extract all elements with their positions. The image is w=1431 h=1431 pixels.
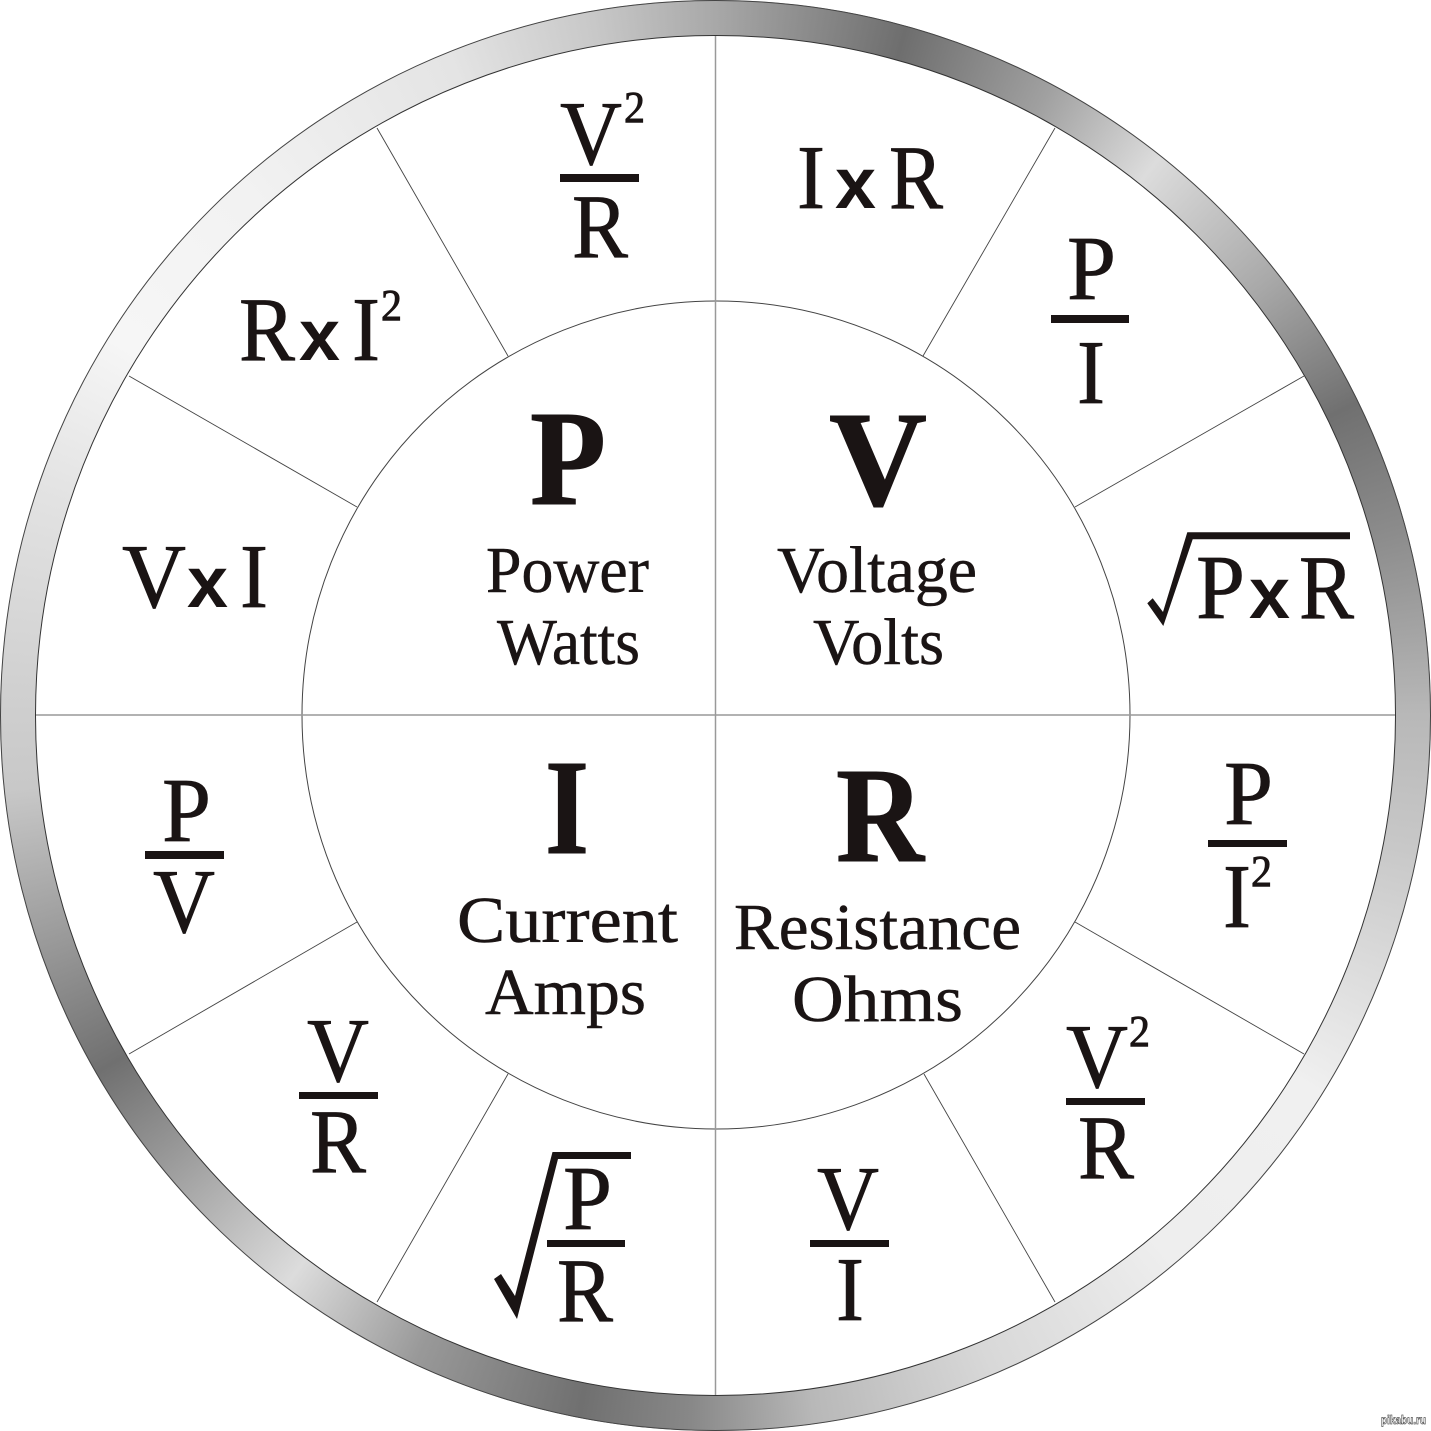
panel: Resistance: Ohms [792, 963, 963, 1036]
formula: V over I: V [817, 1148, 879, 1249]
formula: I x R: R [889, 127, 943, 228]
formula: P over I: P [1067, 218, 1116, 319]
formula: I x R: x [835, 144, 876, 224]
formula: square root of P x R: R [1299, 537, 1354, 638]
formula: P over V [145, 760, 224, 952]
formula: V squared over R (resistance): 2 [1129, 1007, 1150, 1056]
formula: square root of P over R [494, 1148, 631, 1341]
formula: V squared over R (power): V [560, 83, 622, 184]
formula: R x I squared: I [352, 279, 380, 380]
panel: Current: Current [457, 884, 678, 957]
panel: Power: Watts [497, 606, 640, 679]
panel: Voltage: Volts [813, 606, 944, 679]
formula: V squared over R (resistance): V [1066, 1006, 1128, 1107]
panel: Voltage [777, 385, 977, 679]
formula: P over I squared: P [1224, 743, 1273, 844]
panel: Resistance: Resistance [734, 891, 1021, 964]
formula: V x I: V [122, 526, 186, 627]
panel: Power: P [530, 384, 606, 534]
panel: Resistance [734, 741, 1021, 1036]
formula: P over I [1051, 218, 1129, 423]
formula: V over R [299, 1000, 378, 1192]
formula: square root of P over R: R [557, 1240, 613, 1341]
formula: P over I squared [1208, 743, 1287, 947]
panel: Voltage: V [829, 385, 927, 535]
formula: P over I squared: I [1223, 846, 1251, 947]
panel: Voltage: Voltage [777, 534, 977, 607]
formula: square root of P over R: P [563, 1148, 612, 1249]
formula: V over R: V [307, 1000, 369, 1101]
formula: V over I: I [836, 1239, 864, 1340]
panel: Current: I [545, 733, 589, 883]
formula: I x R: I [797, 127, 825, 228]
formula: R x I squared: 2 [381, 281, 402, 330]
formula: V x I: I [240, 526, 268, 627]
formula: V squared over R (power): R [572, 176, 628, 277]
formula: P over I squared: 2 [1251, 847, 1272, 896]
panel: Power: Power [486, 534, 649, 607]
formula: R x I squared [239, 279, 402, 380]
formula: V x I: x [187, 543, 228, 623]
formula: I x R [797, 127, 943, 228]
formula: V squared over R (power) [560, 83, 645, 277]
panel: Resistance: R [836, 741, 926, 891]
formula: V x I [122, 526, 268, 627]
formula: P over I: I [1077, 322, 1105, 423]
formula: V squared over R (resistance) [1066, 1006, 1150, 1198]
formula: square root of P x R: x [1249, 554, 1290, 634]
formula: P over V: P [162, 760, 211, 861]
formula: R x I squared: R [239, 279, 295, 380]
formula: square root of P x R: P [1196, 537, 1245, 638]
formula: V over I [810, 1148, 889, 1340]
formula: V squared over R (resistance): R [1078, 1097, 1134, 1198]
panel: Current [457, 733, 678, 1029]
panel: Power [486, 384, 649, 679]
formula: V over R: R [310, 1091, 366, 1192]
formula: V squared over R (power): 2 [624, 83, 645, 132]
panel: Current: Amps [485, 956, 646, 1029]
formula: R x I squared: x [299, 296, 340, 376]
formula: square root of P x R [1147, 532, 1354, 638]
formula: P over V: V [153, 851, 215, 952]
